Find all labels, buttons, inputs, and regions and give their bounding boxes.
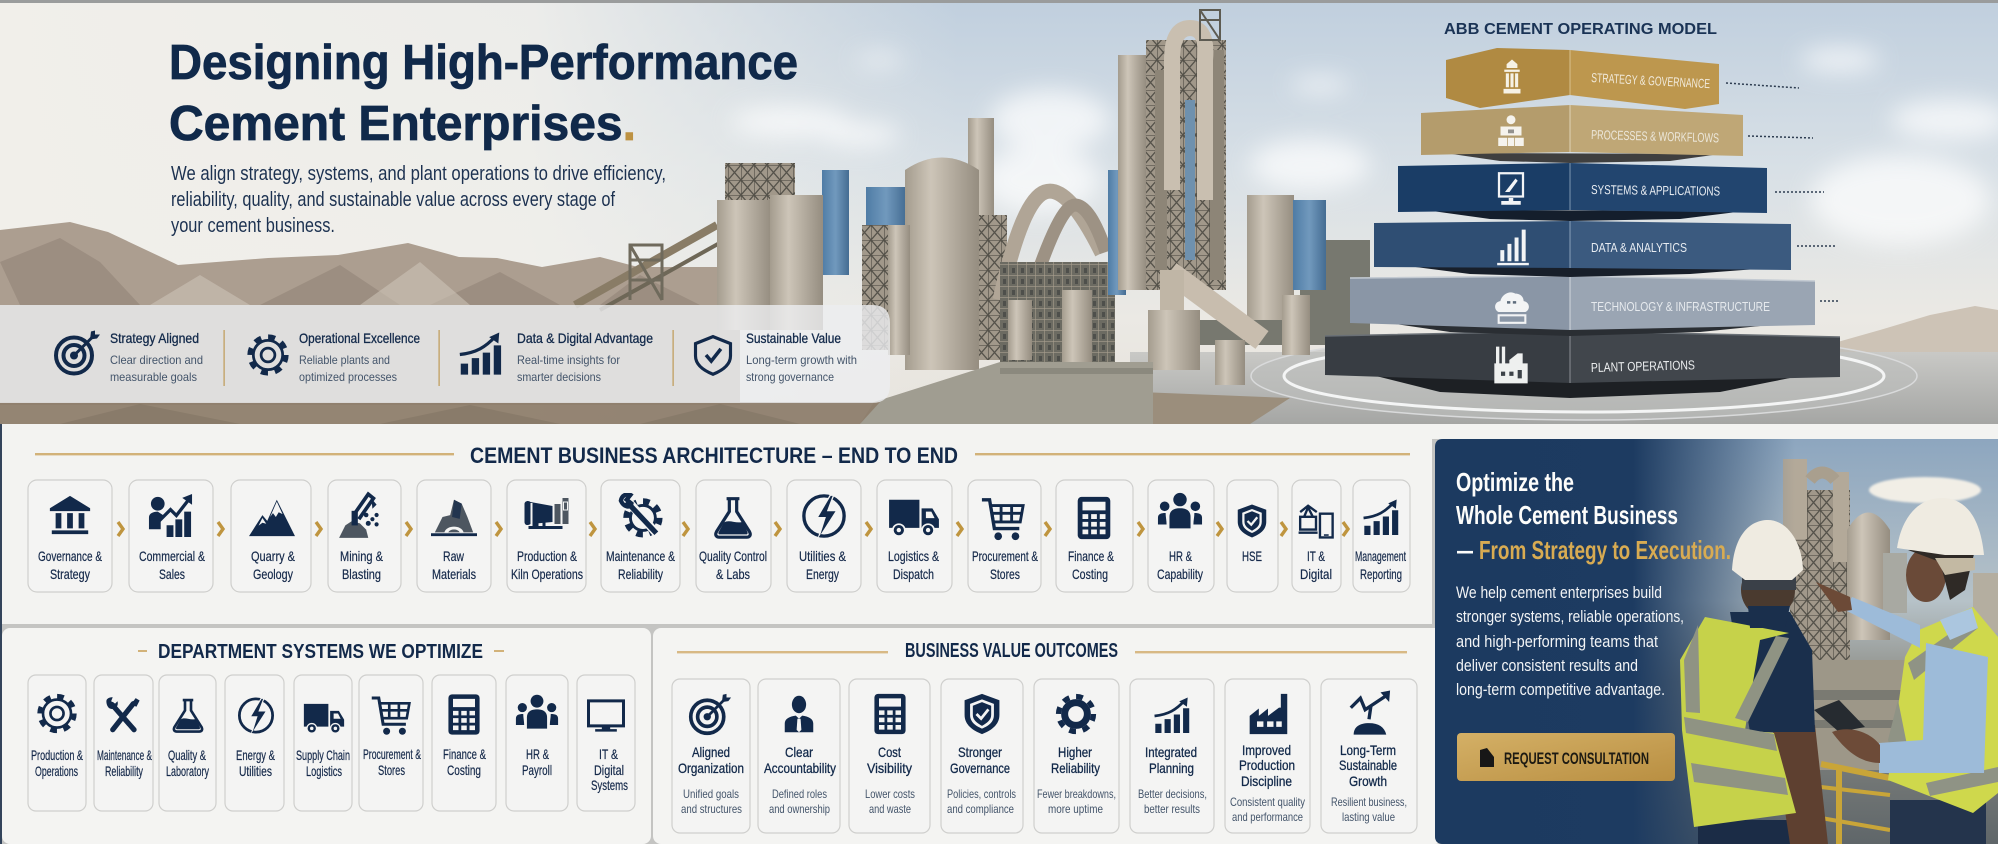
card: management reporting: Reporting bbox=[1360, 566, 1402, 582]
button: request consultation bbox=[1457, 733, 1675, 781]
card: long-term sustainable growth bbox=[1321, 679, 1417, 833]
panel: hero banner with cement plant scene bbox=[0, 0, 1998, 424]
card: long-term sustainable growth: Long-Term bbox=[1340, 742, 1396, 758]
title: Designing High-Performance bbox=[169, 36, 798, 90]
card: management reporting bbox=[1353, 480, 1410, 592]
body text: long-term competitive advantage. bbox=[1456, 680, 1665, 699]
panel: business value outcomes bbox=[653, 628, 1443, 844]
card: hse bbox=[1227, 480, 1278, 592]
layer: technology and infrastructure bbox=[1350, 276, 1815, 336]
pillar: operational excellence: Reliable plants and bbox=[299, 353, 390, 367]
arrow bbox=[1217, 522, 1222, 536]
arrow bbox=[590, 522, 595, 536]
card: improved production discipline: Improved bbox=[1242, 742, 1291, 758]
card: finance and costing: Finance & bbox=[443, 746, 486, 762]
body text bbox=[1456, 583, 1684, 699]
card: production and kiln operations: Kiln Operations bbox=[511, 566, 583, 582]
card: quality and laboratory: Laboratory bbox=[166, 763, 209, 779]
card: it and digital systems: Digital bbox=[594, 762, 624, 778]
card: procurement and stores: Stores bbox=[990, 566, 1020, 582]
panel: department systems bbox=[2, 628, 651, 844]
card: energy and utilities: Energy & bbox=[236, 747, 275, 763]
card: cost visibility: Visibility bbox=[867, 760, 912, 776]
card: integrated planning: better results bbox=[1144, 802, 1200, 816]
card: aligned organization: Unified goals bbox=[683, 787, 739, 801]
body text: and high-performing teams that bbox=[1456, 632, 1658, 651]
card: long-term sustainable growth: lasting value bbox=[1342, 810, 1395, 824]
heading: call to action: Optimize the bbox=[1456, 467, 1574, 497]
layer: processes and workflows: PROCESSES & WORKFLOWS bbox=[1591, 127, 1719, 145]
card: quarry and geology: Geology bbox=[253, 566, 293, 582]
card: production and kiln operations: Production & bbox=[517, 548, 577, 564]
card: aligned organization: Aligned bbox=[692, 744, 730, 760]
panel: cement business architecture bbox=[0, 424, 1432, 844]
pillar: sustainable value: strong governance bbox=[746, 370, 834, 384]
card: higher reliability: Reliability bbox=[1051, 760, 1100, 776]
card: finance and costing bbox=[432, 675, 496, 811]
card: quality and laboratory: Quality & bbox=[168, 747, 206, 763]
ground and circular platform bbox=[1130, 347, 1998, 424]
intro paragraph bbox=[171, 163, 666, 237]
card: finance and costing: Finance & bbox=[1068, 548, 1114, 564]
card: maintenance and reliability: Maintenance & bbox=[97, 747, 152, 763]
arrow bbox=[775, 522, 780, 536]
heading: architecture: CEMENT BUSINESS ARCHITECTURE – END TO END bbox=[470, 443, 958, 468]
pillar: data and digital advantage: smarter decisions bbox=[517, 370, 601, 384]
card: utilities and energy: Utilities & bbox=[799, 548, 847, 564]
card: logistics and dispatch bbox=[877, 480, 952, 592]
intro paragraph: We align strategy, systems, and plant operations to drive efficiency, bbox=[171, 163, 666, 185]
card: maintenance and reliability bbox=[94, 675, 153, 811]
card: clear accountability bbox=[758, 679, 840, 833]
card: hse: HSE bbox=[1242, 548, 1262, 564]
photo: worker pointing with tablet bbox=[1814, 498, 1998, 844]
card: production and operations bbox=[28, 675, 86, 811]
card: hr and capability bbox=[1148, 480, 1214, 592]
pillar: data and digital advantage bbox=[460, 332, 653, 381]
card: mining and blasting bbox=[328, 480, 401, 592]
card: maintenance and reliability: Reliability bbox=[618, 566, 663, 582]
card: integrated planning: Integrated bbox=[1145, 744, 1197, 760]
card: stronger governance: and compliance bbox=[947, 802, 1014, 816]
card: energy and utilities: Utilities bbox=[239, 763, 272, 779]
card: mining and blasting: Blasting bbox=[342, 566, 381, 582]
layer: data and analytics: DATA & ANALYTICS bbox=[1591, 240, 1687, 255]
heading: department systems: DEPARTMENT SYSTEMS WE OPTIMIZE bbox=[158, 641, 483, 663]
arrow bbox=[496, 522, 501, 536]
card: cost visibility bbox=[849, 679, 930, 833]
card: governance and strategy bbox=[28, 480, 112, 592]
card: production and operations: Production & bbox=[31, 747, 83, 763]
card: commercial and sales bbox=[129, 480, 213, 592]
title bbox=[169, 36, 798, 151]
card: utilities and energy: Energy bbox=[806, 566, 839, 582]
layer: processes and workflows bbox=[1421, 105, 1743, 163]
card: mining and blasting: Mining & bbox=[340, 548, 384, 564]
card: it and digital bbox=[1292, 480, 1341, 592]
card: production and operations: Operations bbox=[35, 763, 78, 779]
layer: systems and applications bbox=[1398, 163, 1767, 221]
card: stronger governance: Policies, controls bbox=[947, 787, 1016, 801]
card: finance and costing bbox=[1056, 480, 1133, 592]
intro paragraph: reliability, quality, and sustainable value across every stage of bbox=[171, 189, 615, 211]
railing bbox=[1821, 764, 1890, 844]
pillar: data and digital advantage: Real-time insights for bbox=[517, 353, 620, 367]
card: hr and payroll bbox=[506, 675, 568, 811]
card: supply chain logistics bbox=[294, 675, 352, 811]
card: raw materials: Materials bbox=[432, 566, 476, 582]
chart: layered operating model pyramid bbox=[1325, 48, 1840, 398]
arrow bbox=[316, 522, 321, 536]
card: procurement and stores bbox=[968, 480, 1041, 592]
arrow bbox=[406, 522, 411, 536]
pillar: sustainable value: Long-term growth with bbox=[746, 353, 857, 367]
card: higher reliability bbox=[1034, 679, 1119, 833]
card: raw materials: Raw bbox=[443, 548, 465, 564]
heading: call to action bbox=[1456, 467, 1731, 565]
layer: strategy and governance bbox=[1446, 48, 1719, 109]
card: improved production discipline bbox=[1225, 679, 1310, 833]
heading: call to action: Whole Cement Business bbox=[1456, 500, 1678, 530]
card: raw materials bbox=[417, 480, 491, 592]
card: energy and utilities bbox=[225, 675, 284, 811]
card: commercial and sales: Commercial & bbox=[139, 548, 205, 564]
card: it and digital: Digital bbox=[1300, 566, 1332, 582]
card: procurement and stores: Stores bbox=[378, 762, 405, 778]
card: hr and capability: HR & bbox=[1169, 548, 1192, 564]
layer: technology and infrastructure: TECHNOLOGY & INFRASTRUCTURE bbox=[1591, 299, 1770, 314]
body text: We help cement enterprises build bbox=[1456, 583, 1662, 602]
card: quality and laboratory bbox=[159, 675, 216, 811]
card: quality control and labs: & Labs bbox=[716, 566, 750, 582]
arrow bbox=[1138, 522, 1143, 536]
card: long-term sustainable growth: Resilient business, bbox=[1331, 795, 1407, 809]
card: cost visibility: Lower costs bbox=[865, 787, 915, 801]
arrow bbox=[1281, 522, 1286, 536]
photo: plant tower bbox=[1783, 459, 1998, 770]
card: quality control and labs: Quality Control bbox=[699, 548, 767, 564]
card: integrated planning: Planning bbox=[1149, 760, 1194, 776]
layer: systems and applications: SYSTEMS & APPLICATIONS bbox=[1591, 182, 1720, 199]
card: improved production discipline: Consistent quality bbox=[1230, 795, 1305, 809]
pillar: sustainable value bbox=[696, 330, 857, 384]
card: supply chain logistics: Logistics bbox=[306, 763, 342, 779]
card: stronger governance: Governance bbox=[950, 760, 1010, 776]
card: supply chain logistics: Supply Chain bbox=[296, 747, 350, 763]
pillar: strategy aligned: Clear direction and bbox=[110, 353, 203, 367]
pillar: sustainable value: Sustainable Value bbox=[746, 330, 841, 346]
dotted leader lines bbox=[1726, 83, 1838, 301]
card: clear accountability: and ownership bbox=[769, 802, 830, 816]
card: procurement and stores bbox=[359, 675, 423, 811]
pillar: strategy aligned bbox=[56, 330, 203, 384]
card: commercial and sales: Sales bbox=[159, 566, 185, 582]
arrow bbox=[957, 522, 962, 536]
card: clear accountability: Clear bbox=[785, 744, 813, 760]
arrow bbox=[1045, 522, 1050, 536]
card: cost visibility: and waste bbox=[869, 802, 911, 816]
card: finance and costing: Costing bbox=[447, 762, 481, 778]
card: procurement and stores: Procurement & bbox=[972, 548, 1038, 564]
layer: data and analytics bbox=[1374, 221, 1791, 277]
layer: plant operations bbox=[1325, 331, 1840, 398]
photo: worker in navy shirt bbox=[1680, 520, 1828, 844]
card: it and digital systems bbox=[577, 675, 635, 811]
card: clear accountability: Defined roles bbox=[772, 787, 827, 801]
card: long-term sustainable growth: Sustainable bbox=[1339, 757, 1397, 773]
card: maintenance and reliability: Reliability bbox=[105, 763, 143, 779]
card: finance and costing: Costing bbox=[1072, 566, 1108, 582]
button: request consultation: REQUEST CONSULTATION bbox=[1504, 749, 1649, 768]
card: stronger governance: Stronger bbox=[958, 744, 1002, 760]
heading: call to action: From Strategy to Execution. bbox=[1479, 535, 1731, 565]
card: higher reliability: Fewer breakdowns, bbox=[1037, 787, 1116, 801]
card: hr and payroll: Payroll bbox=[522, 762, 552, 778]
arrow bbox=[218, 522, 223, 536]
card: long-term sustainable growth: Growth bbox=[1349, 773, 1387, 789]
arrow bbox=[866, 522, 871, 536]
card: integrated planning: Better decisions, bbox=[1138, 787, 1207, 801]
body text: deliver consistent results and bbox=[1456, 656, 1638, 675]
card: quality control and labs bbox=[696, 480, 771, 592]
card: stronger governance bbox=[941, 679, 1023, 833]
card: logistics and dispatch: Logistics & bbox=[888, 548, 939, 564]
right margin strip bbox=[1432, 424, 1998, 439]
pillar: strategy aligned: measurable goals bbox=[110, 370, 197, 384]
pillar: strategy aligned: Strategy Aligned bbox=[110, 330, 199, 346]
layer: strategy and governance: STRATEGY & GOVERNANCE bbox=[1591, 70, 1711, 91]
card: improved production discipline: Discipline bbox=[1241, 773, 1292, 789]
arrow bbox=[683, 522, 688, 536]
card: maintenance and reliability bbox=[601, 480, 680, 592]
panel: call to action with photo bbox=[1435, 439, 1998, 844]
card: improved production discipline: and performance bbox=[1232, 810, 1303, 824]
card: production and kiln operations bbox=[507, 480, 586, 592]
card: quarry and geology: Quarry & bbox=[251, 548, 296, 564]
card: management reporting: Management bbox=[1355, 548, 1406, 564]
heading: business value outcomes: BUSINESS VALUE OUTCOMES bbox=[905, 640, 1118, 662]
card: cost visibility: Cost bbox=[878, 744, 901, 760]
panel: four value pillars strip bbox=[0, 305, 890, 403]
card: aligned organization bbox=[672, 679, 750, 833]
pillar: operational excellence bbox=[251, 330, 420, 384]
arrow bbox=[118, 522, 123, 536]
heading: operating model: ABB CEMENT OPERATING MODEL bbox=[1444, 21, 1717, 38]
card: it and digital: IT & bbox=[1307, 548, 1325, 564]
card: logistics and dispatch: Dispatch bbox=[893, 566, 934, 582]
card: it and digital systems: IT & bbox=[599, 746, 618, 762]
body text: stronger systems, reliable operations, bbox=[1456, 607, 1684, 626]
card: governance and strategy: Strategy bbox=[50, 566, 90, 582]
card: quarry and geology bbox=[231, 480, 311, 592]
card: hr and payroll: HR & bbox=[526, 746, 549, 762]
illustration: cement plant structures bbox=[575, 10, 1370, 424]
card: aligned organization: Organization bbox=[678, 760, 744, 776]
heading: call to action: — bbox=[1457, 535, 1473, 565]
card: it and digital systems: Systems bbox=[591, 777, 628, 793]
title: Cement Enterprises. bbox=[169, 97, 636, 151]
card: maintenance and reliability: Maintenance & bbox=[606, 548, 675, 564]
card: clear accountability: Accountability bbox=[764, 760, 836, 776]
card: procurement and stores: Procurement & bbox=[363, 746, 421, 762]
card: aligned organization: and structures bbox=[681, 802, 742, 816]
card: higher reliability: more uptime bbox=[1048, 802, 1103, 816]
pillar: data and digital advantage: Data & Digital Advantage bbox=[517, 330, 653, 346]
intro paragraph: your cement business. bbox=[171, 215, 335, 237]
arrow bbox=[1343, 522, 1348, 536]
pillar: operational excellence: optimized processes bbox=[299, 370, 397, 384]
layer: plant operations: PLANT OPERATIONS bbox=[1591, 357, 1695, 375]
pillar: operational excellence: Operational Excellence bbox=[299, 330, 420, 346]
card: hr and capability: Capability bbox=[1157, 566, 1203, 582]
card: utilities and energy bbox=[787, 480, 861, 592]
card: governance and strategy: Governance & bbox=[38, 548, 102, 564]
card: integrated planning bbox=[1130, 679, 1214, 833]
card: improved production discipline: Production bbox=[1239, 757, 1295, 773]
card: higher reliability: Higher bbox=[1058, 744, 1092, 760]
